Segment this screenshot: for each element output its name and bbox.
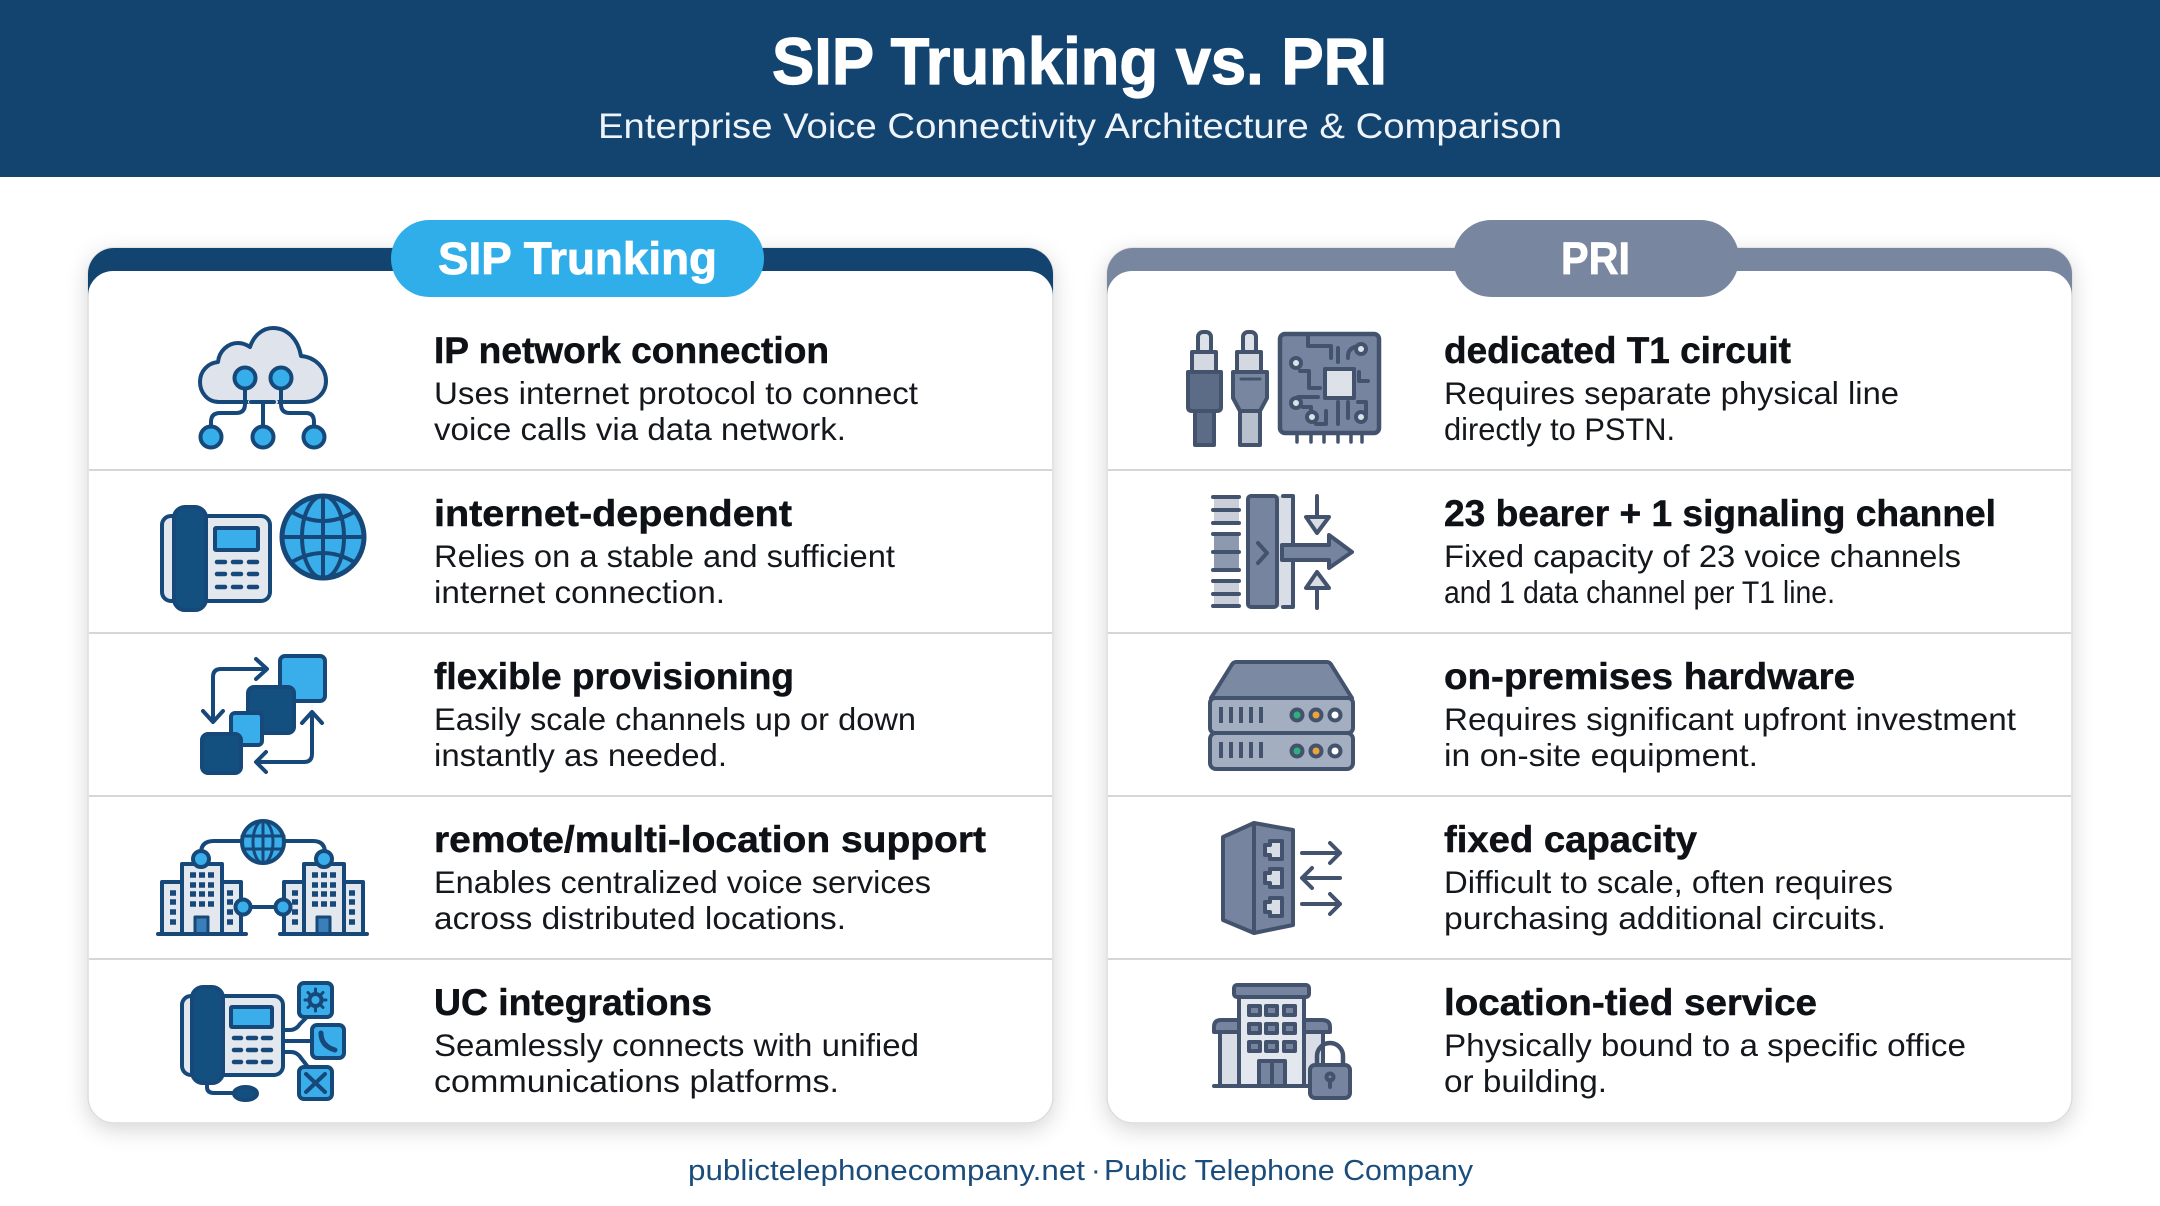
row: internet-dependent	[162, 493, 895, 610]
icon: cloud network	[200, 328, 326, 448]
row description: Difficult to scale, often requires	[1444, 864, 1893, 900]
row description	[1444, 538, 1961, 610]
row description	[434, 1027, 919, 1099]
row: 23 bearer + 1 signaling channel	[1213, 493, 1996, 610]
row description	[1444, 864, 1893, 936]
row description: communications platforms.	[434, 1063, 839, 1099]
row description: instantly as needed.	[434, 737, 727, 773]
row heading: fixed capacity	[1444, 819, 1697, 860]
row description: purchasing additional circuits.	[1444, 900, 1886, 936]
row description: internet connection.	[434, 574, 725, 610]
row description: Fixed capacity of 23 voice channels	[1444, 538, 1961, 574]
row description	[1444, 375, 1899, 447]
row heading: 23 bearer + 1 signaling channel	[1444, 493, 1996, 534]
row heading: flexible provisioning	[434, 656, 794, 697]
panel: SIP Trunking	[88, 220, 1053, 1123]
icon: fixed port switch with arrows	[1223, 823, 1340, 933]
row heading: remote/multi-location support	[434, 819, 986, 860]
title: SIP Trunking vs. PRI	[772, 24, 1387, 98]
icon: server rack	[1210, 662, 1353, 769]
row description: in on-site equipment.	[1444, 737, 1758, 773]
subtitle: Enterprise Voice Connectivity Architecture & Comparison	[598, 107, 1562, 146]
row description: Seamlessly connects with unified	[434, 1027, 919, 1063]
row description	[434, 864, 931, 936]
icon: phone with connected apps	[182, 983, 344, 1100]
row heading: on-premises hardware	[1444, 656, 1855, 697]
row description: Enables centralized voice services	[434, 864, 931, 900]
icon: desk phone and globe	[162, 496, 364, 610]
panel top band	[88, 248, 1053, 296]
row description: across distributed locations.	[434, 900, 846, 936]
footer attribution: publictelephonecompany.net	[688, 1155, 1085, 1187]
row: flexible provisioning	[202, 656, 916, 773]
badge: SIP Trunking: SIP Trunking	[438, 233, 717, 284]
badge: PRI	[1453, 220, 1739, 297]
row heading: IP network connection	[434, 330, 829, 371]
badge: PRI: PRI	[1561, 233, 1630, 284]
panel: PRI	[1107, 220, 2072, 1123]
row description	[1444, 1027, 1966, 1099]
icon: scaling blocks and arrows	[202, 656, 325, 773]
footer attribution	[688, 1155, 1474, 1187]
row: remote/multi-location support	[158, 819, 986, 936]
row description: Physically bound to a specific office	[1444, 1027, 1966, 1063]
row heading: dedicated T1 circuit	[1444, 330, 1791, 371]
row description: Relies on a stable and sufficient	[434, 538, 895, 574]
row description: Easily scale channels up or down	[434, 701, 916, 737]
row description: Uses internet protocol to connect	[434, 375, 918, 411]
row description: and 1 data channel per T1 line.	[1444, 574, 1835, 610]
row description	[434, 538, 895, 610]
row description: directly to PSTN.	[1444, 411, 1675, 447]
icon: T1 connectors and circuit board	[1188, 332, 1379, 445]
row description	[434, 701, 916, 773]
row description: voice calls via data network.	[434, 411, 846, 447]
row: location-tied service	[1214, 982, 1966, 1099]
footer attribution: Public Telephone Company	[1104, 1155, 1474, 1187]
row: fixed capacity	[1223, 819, 1893, 936]
icon: building with padlock	[1214, 985, 1350, 1098]
row heading: location-tied service	[1444, 982, 1817, 1023]
row: UC integrations	[182, 982, 919, 1100]
header banner	[0, 0, 2160, 177]
row description: or building.	[1444, 1063, 1607, 1099]
row description: Requires separate physical line	[1444, 375, 1899, 411]
row description	[434, 375, 918, 447]
row: on-premises hardware	[1210, 656, 2016, 773]
badge: SIP Trunking	[391, 220, 764, 297]
panel top band	[1107, 248, 2072, 296]
row heading: internet-dependent	[434, 493, 792, 534]
row description: Requires significant upfront investment	[1444, 701, 2016, 737]
icon: multiplexed channels arrow	[1213, 496, 1352, 608]
row: IP network connection	[200, 328, 918, 448]
panel card	[1107, 248, 2072, 1123]
row description	[1444, 701, 2016, 773]
row heading: UC integrations	[434, 982, 712, 1023]
footer attribution: ·	[1091, 1155, 1101, 1187]
icon: connected office buildings	[158, 821, 367, 934]
row: dedicated T1 circuit	[1188, 330, 1899, 447]
panel card	[88, 248, 1053, 1123]
